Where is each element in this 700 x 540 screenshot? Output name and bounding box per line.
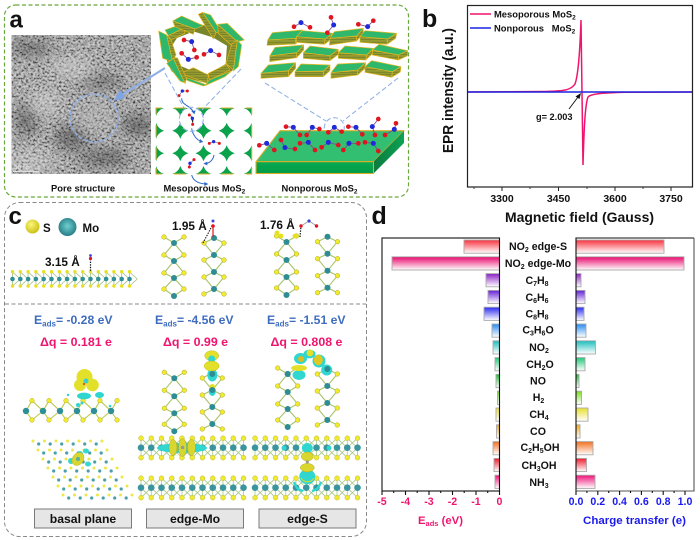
gas labels: NO: [529, 342, 545, 354]
charge axis tick labels: 0.4: [612, 496, 627, 508]
caption: nonporous: Nonporous MoS: [282, 182, 354, 194]
gas labels: 2: [540, 398, 544, 405]
diffusion path of molecules: [177, 89, 221, 186]
highlighted pore circle and arrow: [70, 68, 165, 142]
charge axis tick labels: [569, 496, 692, 508]
adsorption energies: = -0.28 eV: [56, 313, 113, 327]
gas labels: 3: [545, 483, 549, 490]
gas labels: H: [534, 324, 542, 336]
nonporous MoS2 slab: [256, 131, 404, 174]
axes: [382, 238, 694, 495]
nonporous slab stack: [261, 28, 408, 78]
label: edge-S: [259, 509, 356, 528]
gas labels: NH: [529, 477, 545, 489]
gas labels: H: [537, 292, 545, 304]
caption: mesoporous: 2: [242, 188, 246, 196]
energy axis title: E: [418, 515, 426, 527]
adsorption energies: = -1.51 eV: [289, 313, 346, 327]
edge-Mo adsorption structure: 1.95 Å: [172, 219, 207, 233]
gas labels: C: [525, 275, 533, 287]
gas labels: NO: [530, 376, 546, 388]
legend: Nonporous MoS: [494, 22, 572, 34]
gas labels: 3: [537, 466, 541, 473]
adsorption energies: E: [34, 313, 42, 327]
energy axis tick labels: [377, 496, 503, 508]
heading a: a: [10, 6, 24, 34]
energy axis tick labels: -5: [377, 496, 387, 508]
TEM micrograph: [6, 35, 154, 174]
edge-Mo bottom views: [138, 436, 247, 500]
energy axis tick labels: -3: [424, 496, 434, 508]
adsorption energies: ads: [163, 320, 177, 328]
x tick labels: [490, 193, 683, 205]
g-factor annotation: g= 2.003: [536, 112, 573, 122]
legend: [470, 8, 576, 36]
gas labels: OH: [541, 460, 557, 472]
gas labels: C: [525, 308, 533, 320]
edge-S adsorption structure: 1.76 Å: [260, 218, 295, 232]
gas labels: 6: [533, 298, 537, 305]
gas labels: 2: [545, 348, 549, 355]
x tick labels: 3600: [603, 193, 627, 205]
gas labels: 2: [525, 247, 529, 254]
charge axis tick labels: 0.8: [656, 496, 671, 508]
gas labels: 2: [521, 264, 525, 271]
charge axis tick labels: 0.0: [569, 496, 583, 508]
basal side view with charge density: [23, 369, 119, 422]
x axis title: Magnetic field (Gauss): [505, 210, 654, 225]
basal plane adsorption structure: [10, 254, 137, 288]
x tick labels: 3450: [547, 193, 570, 205]
gas labels: edge-S: [529, 241, 567, 253]
energy axis title: ads: [426, 519, 438, 528]
heading d: d: [372, 202, 387, 230]
gas labels: CH: [526, 359, 542, 371]
charge transfer values: Δq = 0.99 e: [163, 335, 228, 349]
plot frame and ticks: [468, 6, 692, 191]
edge-Mo side view with charge density: [162, 351, 225, 434]
atom legend: Mo: [82, 223, 99, 235]
gas labels: 8: [545, 281, 549, 288]
adsorption energies: ads: [42, 320, 56, 328]
label: edge-S: edge-S: [287, 512, 328, 526]
charge transfer values: Δq = 0.808 e: [270, 335, 343, 349]
x tick labels: 3300: [490, 193, 514, 205]
gas labels: H: [532, 442, 540, 454]
gas labels: edge-Mo: [525, 258, 572, 270]
gas labels: 6: [545, 298, 549, 305]
charge transfer values: [40, 335, 343, 349]
mesoporous ring of slabs: [159, 12, 244, 86]
label: edge-Mo: [146, 509, 244, 528]
basal top view: [32, 440, 134, 500]
adsorption energies: = -4.56 eV: [177, 313, 234, 327]
heading b: b: [422, 5, 437, 33]
energy axis tick labels: -1: [471, 496, 481, 508]
edge-S adsorption structure: [260, 218, 340, 298]
charge axis tick labels: 1.0: [678, 496, 692, 508]
gas labels: C: [522, 324, 530, 336]
heading c: c: [8, 203, 22, 230]
energy axis title: (eV): [438, 515, 463, 527]
gas labels: H: [533, 392, 540, 404]
charge axis tick labels: 0.2: [590, 496, 605, 508]
panel c: DFT structures: [4, 202, 366, 536]
x tick labels: 3750: [659, 193, 683, 205]
charge axis tick labels: 0.6: [634, 496, 649, 508]
adsorption energies: E: [267, 313, 275, 327]
g-factor annotation: [536, 93, 581, 122]
atom legend: S: [43, 223, 51, 235]
gas labels: 8: [545, 314, 549, 322]
gas labels: CO: [530, 426, 546, 438]
basal plane adsorption structure: 3.15 Å: [45, 255, 80, 269]
caption: pore structure: Pore structure: [51, 182, 115, 194]
mesoporous cross-section: [155, 108, 252, 174]
charge transfer bars: [576, 240, 684, 488]
caption: mesoporous: Mesoporous MoS: [164, 182, 242, 194]
gas labels: O: [545, 359, 554, 371]
gas labels: O: [545, 324, 554, 336]
atom legend: [26, 218, 99, 236]
TEM micrograph: 10 nm: [14, 165, 31, 171]
gas labels: C: [525, 292, 533, 304]
label: basal plane: basal plane: [50, 512, 116, 526]
panel d: adsorption energy and charge transfer charts: [372, 202, 694, 528]
gas labels: [505, 241, 572, 490]
adsorption energies: E: [155, 313, 163, 327]
edge-Mo adsorption structure: [162, 219, 226, 299]
gas labels: OH: [544, 442, 560, 454]
energy axis tick labels: -4: [401, 496, 410, 508]
label: basal plane: [34, 509, 132, 528]
legend: 2: [572, 28, 576, 36]
gas labels: NO: [505, 258, 521, 270]
gas labels: NO: [509, 241, 525, 253]
adsorption energy bars: [392, 240, 500, 488]
gas labels: H: [537, 308, 545, 320]
edge-S bottom views: [252, 436, 361, 500]
gas labels: 2: [542, 365, 546, 372]
gas labels: 6: [542, 330, 546, 338]
charge axis title: Charge transfer (e): [583, 515, 686, 527]
label: edge-Mo: edge-Mo: [170, 512, 220, 526]
gas labels: 8: [533, 314, 537, 322]
nonporous top molecules: [292, 15, 376, 35]
edge-S side view with charge density: [275, 350, 340, 430]
adsorption energies: [34, 313, 346, 328]
panel b: EPR spectrum: [422, 5, 692, 225]
gas labels: 3: [530, 330, 534, 338]
gas labels: CH: [521, 460, 537, 472]
gas labels: C: [520, 442, 528, 454]
energy axis tick labels: -2: [448, 496, 457, 508]
gas labels: 5: [540, 448, 544, 455]
panel a: pore structure: [4, 5, 408, 197]
caption: nonporous: 2: [354, 188, 358, 196]
legend: Mesoporous MoS: [494, 8, 572, 20]
charge transfer values: Δq = 0.181 e: [40, 335, 112, 349]
gas molecules inside ring: [179, 38, 221, 62]
gas labels: 7: [533, 281, 537, 288]
y axis title: EPR intensity (a.u.): [441, 28, 457, 153]
adsorption energies: ads: [275, 320, 289, 328]
gas labels: 2: [528, 448, 532, 455]
gas labels: H: [537, 275, 545, 287]
energy axis tick labels: 0: [497, 496, 503, 508]
gas labels: 4: [545, 415, 549, 422]
EPR curves: [468, 20, 692, 165]
legend: 2: [572, 14, 576, 22]
gas labels: CH: [529, 409, 545, 421]
molecules on nonporous slab: [257, 117, 398, 153]
dashed zoom guides: [165, 69, 398, 138]
